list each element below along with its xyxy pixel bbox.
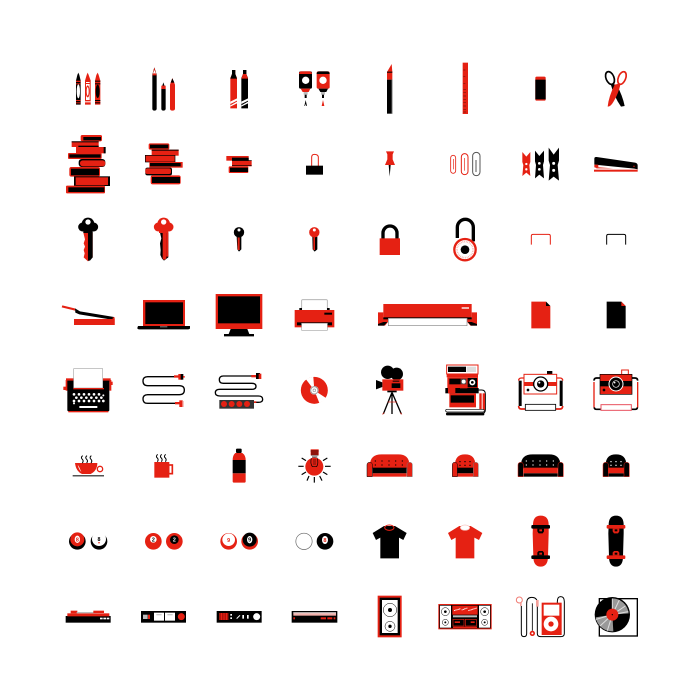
icon: pencils [152, 67, 175, 111]
icon: vinyl record [595, 597, 637, 636]
icon: bottle [233, 449, 246, 483]
icon: combination lock [454, 219, 476, 260]
icon: black sofa [518, 454, 563, 477]
icon: music player with earphones [516, 597, 564, 637]
icon block: rows 3-4, left [62, 218, 334, 336]
icon block: rows 1-2, right [385, 63, 638, 181]
icon: red instant camera [594, 370, 638, 410]
icon: speaker [378, 596, 402, 637]
icon: pool balls, white and 8 black: 8 [323, 538, 327, 544]
icon: amplifier [217, 611, 262, 623]
icon: power strip [215, 373, 263, 409]
icon block: rows 7-8, right [373, 516, 637, 637]
icon: stapler [594, 157, 638, 172]
icon: small book stack [226, 156, 252, 173]
icon: black document [607, 302, 626, 328]
icon: mug [154, 454, 172, 478]
icon: compact disc [301, 377, 328, 404]
icon: black armchair [603, 454, 629, 477]
icon block: rows 1-2, left [66, 67, 330, 193]
icon block: rows 7-8, left [66, 532, 337, 623]
icon: printer [295, 300, 334, 330]
icon: cable [143, 374, 185, 407]
icon: black t-shirt [373, 525, 407, 558]
icon: red staple [531, 234, 550, 245]
icon: film camera on tripod [376, 366, 403, 414]
icon: paperclips [451, 152, 480, 176]
icon: monitor [216, 294, 262, 336]
icon: pool balls, white and 8 black [296, 533, 333, 550]
icon: scissors [604, 70, 628, 107]
icon: binder clip [306, 154, 323, 175]
icon: pool balls, number 2 red: 2 [173, 538, 176, 544]
icon: flatbed scanner [62, 305, 115, 325]
icon: black staple [607, 234, 626, 245]
icon: laptop [137, 300, 190, 329]
icon block: rows 5-6, right [367, 365, 638, 477]
icon: instant camera [445, 365, 485, 415]
icon: markers [230, 70, 248, 108]
icon: red armchair [452, 454, 478, 477]
icon: coffee cup [73, 456, 104, 476]
icon: receiver [292, 611, 337, 623]
icon: red document [531, 302, 550, 328]
icon: red t-shirt [448, 525, 482, 558]
icon: pool balls, number 2 red: 2 [152, 537, 155, 543]
icon: light bulb [298, 449, 331, 483]
icon: typewriter [63, 369, 113, 412]
icon: red sofa [367, 454, 412, 477]
icon: wide format printer [378, 304, 477, 326]
icon: white instant camera [519, 371, 563, 410]
icon: eraser [535, 77, 546, 101]
icon: glue bottles [299, 71, 330, 106]
icon block: rows 5-6, left [63, 369, 331, 483]
icon: pool balls, number 9: 9 [227, 538, 230, 544]
icon: crayons [76, 73, 100, 105]
icon: tape deck [141, 611, 186, 623]
icon: turntable [66, 611, 111, 623]
icon: black key [78, 218, 98, 261]
icon: medium book stack [145, 143, 183, 184]
icon: red key [154, 218, 173, 261]
icon: pool balls, number 8 red and white: 8 [98, 537, 101, 543]
icon: small black key [234, 227, 244, 252]
icon: ruler [463, 63, 468, 114]
icon: pool balls, number 8 red and white [69, 532, 107, 550]
icon: boombox [438, 604, 492, 629]
icon: pool balls, number 8 red and white: 8 [76, 537, 79, 543]
icon: pool balls, number 9 [220, 533, 258, 550]
icon block: rows 3-4, right [378, 219, 626, 328]
icon: pool balls, number 2 red [145, 533, 183, 550]
icon: clothespins [522, 148, 559, 181]
icon: red padlock [380, 226, 400, 255]
icon: pool balls, number 9: 9 [248, 538, 251, 544]
icon: small red key [309, 227, 319, 252]
icon: red skateboard [531, 516, 550, 567]
icon: tall book stack [66, 135, 110, 193]
icon: black skateboard [607, 516, 625, 567]
icon: push pin [385, 151, 395, 177]
icon: craft knife [387, 64, 393, 114]
